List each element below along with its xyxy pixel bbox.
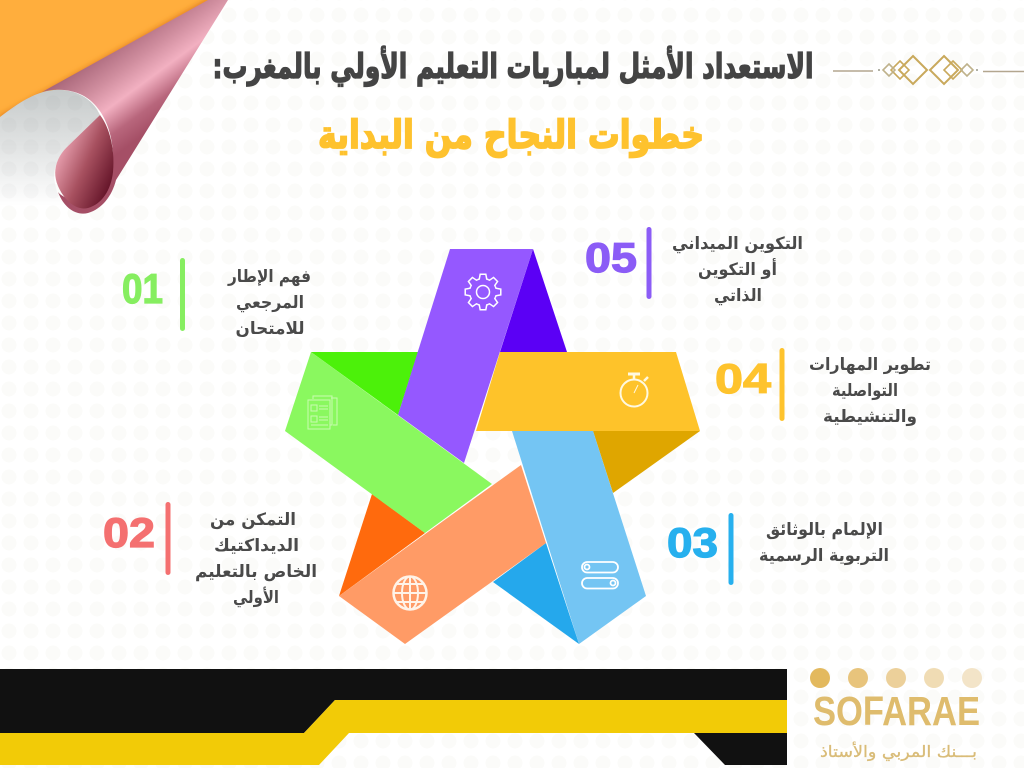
logo tagline: بـــنك المربي والأستاذ bbox=[820, 741, 977, 762]
dark yellow fold bbox=[593, 431, 700, 493]
text 01: المرجعي bbox=[236, 293, 304, 313]
subtitle: خطوات النجاح من البداية bbox=[318, 113, 704, 158]
step 02 bbox=[103, 502, 317, 608]
roll inside bbox=[55, 115, 113, 208]
step 04 bbox=[715, 348, 931, 427]
number 04: 04 bbox=[715, 355, 772, 402]
text 05: الذاتي bbox=[714, 286, 762, 306]
step 01 bbox=[122, 258, 311, 339]
dark blue fold bbox=[493, 543, 579, 644]
purple strip bbox=[398, 249, 533, 463]
dark orange fold bbox=[339, 494, 425, 596]
page curl corner bbox=[0, 0, 228, 214]
text 02: الأولي bbox=[233, 587, 279, 608]
orange corner bbox=[0, 0, 212, 122]
text 04: والتنشيطية bbox=[823, 407, 917, 427]
bar 04 bbox=[780, 348, 784, 421]
step 05 bbox=[585, 227, 803, 306]
ornament: gold diamonds divider bbox=[833, 56, 1024, 84]
number 02: 02 bbox=[103, 509, 155, 556]
number 05: 05 bbox=[585, 234, 637, 281]
dark green fold bbox=[311, 352, 418, 415]
green strip bbox=[285, 352, 492, 533]
grey underside bbox=[0, 90, 100, 192]
orange strip bbox=[339, 465, 546, 644]
text 01: للامتحان bbox=[236, 319, 304, 339]
text 05 bbox=[672, 234, 803, 306]
blue strip bbox=[512, 431, 646, 644]
icon: toggles bbox=[582, 562, 618, 588]
bar 02 bbox=[166, 502, 170, 575]
step 03 bbox=[667, 513, 889, 585]
pink rolled band bbox=[42, 0, 228, 214]
text 02: الديداكتيك bbox=[214, 536, 299, 556]
bar 05 bbox=[646, 227, 652, 299]
black band bbox=[0, 669, 787, 733]
title: الاستعداد الأمثل لمباريات التعليم الأولي بالمغرب: bbox=[212, 45, 814, 87]
number 03: 03 bbox=[667, 519, 718, 566]
logo wordmark: SOFARAE bbox=[813, 688, 980, 734]
icon: documents bbox=[308, 396, 337, 429]
text 02: الخاص بالتعليم bbox=[195, 562, 317, 582]
text 05: أو التكوين bbox=[698, 258, 777, 280]
icon: stopwatch bbox=[620, 374, 648, 406]
text 04 bbox=[809, 355, 931, 427]
logo dots bbox=[810, 668, 982, 688]
text 03 bbox=[759, 520, 889, 566]
number 01: 01 bbox=[122, 265, 163, 312]
star diagram bbox=[285, 249, 700, 644]
black corner bbox=[694, 733, 787, 765]
text 02: التمكن من bbox=[210, 510, 296, 530]
text 03: الإلمام بالوثائق bbox=[766, 520, 883, 540]
dark purple fold bbox=[500, 249, 567, 352]
text 05: التكوين الميداني bbox=[672, 234, 803, 254]
footer band bbox=[0, 669, 787, 765]
bar 01 bbox=[180, 258, 185, 331]
text 03: التربوية الرسمية bbox=[759, 546, 889, 566]
text 02 bbox=[195, 510, 317, 608]
text 01: فهم الإطار bbox=[227, 267, 311, 287]
icon: gear bbox=[465, 274, 501, 310]
logo: SOFARAE bbox=[810, 668, 982, 762]
text 04: التواصلية bbox=[832, 381, 898, 401]
text 01 bbox=[227, 267, 311, 339]
text 04: تطوير المهارات bbox=[809, 355, 931, 375]
icon: globe bbox=[394, 576, 426, 610]
bar 03 bbox=[728, 513, 734, 585]
yellow strip bbox=[476, 352, 700, 431]
yellow band bbox=[0, 700, 787, 765]
